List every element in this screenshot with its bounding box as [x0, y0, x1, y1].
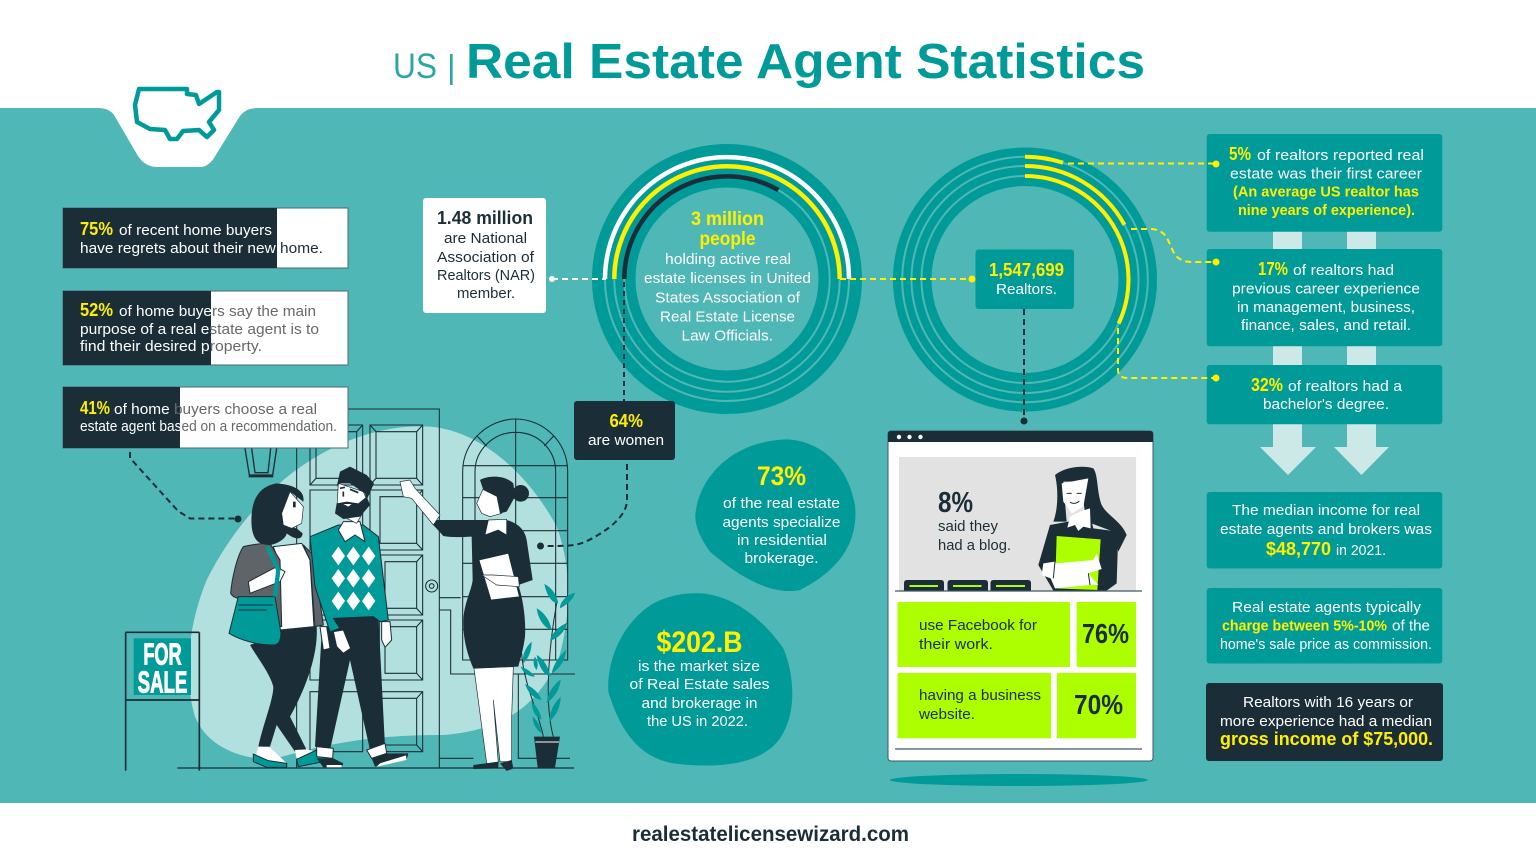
connector: 17%: [1131, 229, 1220, 266]
callout: 1,547,699 realtors: Realtors.: [996, 282, 1057, 298]
panel: 32% bachelor's: bachelor's degree.: [1263, 397, 1389, 413]
connector: 32%: [1118, 328, 1220, 382]
for sale sign: SALE: [138, 665, 187, 699]
panel: 52% purpose: find their desired p roperty.: [80, 339, 262, 355]
panel: 52% purpose: of home buye rs say the main: [119, 304, 316, 320]
callout: 1.48 million NAR: [423, 198, 546, 313]
panel: gross income: more experience had a median: [1220, 714, 1432, 730]
panel: 5% first career: estate was their first career: [1230, 166, 1422, 182]
wall and window: [439, 419, 575, 758]
callout: $202.B market size: and brokerage in: [642, 696, 758, 712]
stat: 70% website: [898, 673, 1136, 738]
callout: 1.48 million NAR: member.: [457, 286, 515, 302]
panel: 17% previous career: 17%: [1258, 259, 1288, 279]
connector: 5%: [1068, 160, 1220, 168]
callout: 73% residential: 73%: [757, 461, 806, 491]
blog panel: had a blog.: [938, 538, 1011, 554]
panel: 17% previous career: finance, sales, and retail.: [1241, 318, 1411, 334]
panel: 32% bachelor's: [1207, 365, 1442, 424]
text: 3 million people: Real Estate License: [660, 310, 795, 326]
browser shadow: [890, 774, 1148, 786]
callout: 64% are women: 64%: [610, 411, 643, 431]
blog panel: said they: [938, 519, 999, 535]
potted plant: [521, 584, 575, 768]
man buyer: [310, 467, 408, 767]
panel: browser window: [888, 431, 1153, 761]
panel: median income: The median income for real: [1232, 503, 1420, 519]
panel: median income: estate agents and brokers was: [1220, 522, 1432, 538]
callout: 1.48 million NAR: 1.48 million: [437, 208, 533, 228]
callout: 73% residential: [695, 439, 855, 591]
icon: US map: [135, 89, 219, 139]
illustration: couple and agent at the door: [126, 409, 575, 771]
panel: 41% recommendation: 41%: [80, 398, 110, 418]
text: 3 million people: estate licenses in United: [644, 271, 811, 287]
callout: $202.B market size: is the market size: [638, 659, 760, 675]
panel: median income: [1207, 492, 1442, 568]
chart: 1,547,699 realtors ring: [902, 157, 1148, 402]
callout: 1.48 million NAR: Realtors (NAR): [437, 268, 535, 284]
panel: 52% purpose: [63, 291, 348, 365]
text: 3 million people: States Association of: [655, 290, 801, 306]
connector: realtors box to browser: [1020, 309, 1028, 424]
panel: 41% recommendation: of home buyers choose a real: [114, 402, 317, 418]
illustration: woman with green book: [1038, 467, 1127, 591]
text: 3 million people: 3 million: [691, 208, 764, 230]
light blob background: [189, 426, 568, 759]
callout: $202.B market size: the US in 2022.: [647, 714, 748, 730]
connector: dark line to 64% box: [623, 282, 625, 401]
panel: 41% recommendation: estate agent based on a recommendation.: [80, 419, 337, 435]
connector: 41% box to woman: [130, 452, 242, 522]
title: |: [447, 48, 456, 85]
panel: gross income: [1206, 683, 1443, 761]
callout: 64% are women: are women: [588, 433, 664, 449]
panel: 5% first career: 5%: [1229, 144, 1251, 164]
panel: 5% first career: (An average US realtor has: [1233, 184, 1419, 200]
callout: 1.48 million NAR: Association of: [437, 250, 535, 266]
panel: median income: $48,770: [1266, 539, 1331, 559]
stat: 76% Facebook: their work.: [919, 637, 993, 653]
panel: 5% first career: nine years of experience).: [1238, 203, 1415, 219]
panel: commission: charge between 5%-10%: [1222, 618, 1387, 634]
panel: 32% bachelor's: 32%: [1251, 375, 1283, 395]
panel: median income: in 2021.: [1336, 543, 1386, 559]
panel: commission: home's sale price as commission.: [1220, 637, 1432, 653]
stat: 76% Facebook: 76%: [1082, 618, 1129, 649]
panel: 52% purpose: purpose of a real e state agent is to: [80, 322, 319, 338]
callout: 1,547,699 realtors: 1,547,699: [989, 260, 1064, 280]
title: Real Estate Agent Statistics: [466, 35, 1145, 89]
panel: 17% previous career: previous career experience: [1232, 282, 1420, 298]
panel: gross income: gross income of $75,000.: [1220, 729, 1433, 749]
callout: $202.B market size: of Real Estate sales: [630, 677, 770, 693]
ground line: [177, 766, 574, 770]
agent: [400, 477, 533, 771]
stat: 70% website: 70%: [1074, 689, 1123, 720]
blog panel: [899, 457, 1136, 591]
callout: 73% residential: agents specialize: [722, 515, 840, 531]
chart: 3 million ring: [605, 157, 849, 401]
woman buyer: [229, 483, 332, 767]
panel: 75% regrets: [63, 208, 348, 268]
callout: 73% residential: of the real estate: [723, 496, 840, 512]
panel: 75% regrets: of recent home buyers: [119, 223, 272, 239]
callout: 73% residential: brokerage.: [744, 551, 818, 567]
panel: 5% first career: [1207, 134, 1442, 232]
connector: 64% box to agent: [537, 464, 627, 550]
footer: website: realestatelicensewizard.com: [632, 823, 909, 846]
blog panel: 8%: [938, 487, 973, 519]
panel: gross income: Realtors with 16 years or: [1243, 695, 1413, 711]
panel: commission: Real estate agents typically: [1232, 600, 1422, 616]
panel: 32% bachelor's: of realtors had a: [1288, 379, 1403, 395]
callout: 1,547,699 realtors: [976, 250, 1074, 309]
callout: 1.48 million NAR: are National: [444, 231, 527, 247]
panel: 17% previous career: [1207, 249, 1442, 346]
stat: 70% website: website.: [918, 707, 975, 723]
panel: 75% regrets: have regrets about their new home.: [80, 241, 323, 257]
callout: $202.B market size: [608, 593, 792, 766]
text: 3 million people: people: [700, 228, 756, 250]
callout: 64% are women: [574, 401, 675, 460]
text: 3 million people: [644, 208, 811, 344]
lamp: [245, 448, 277, 477]
connector: white line to NAR box: [549, 276, 606, 282]
panel: 17% previous career: in management, business,: [1237, 300, 1415, 316]
panel: 41% recommendation: [63, 387, 348, 448]
for sale sign: FOR: [143, 637, 182, 671]
panel: 52% purpose: 52%: [80, 300, 113, 320]
callout: 73% residential: in residential: [737, 533, 827, 549]
callout: $202.B market size: $202.B: [656, 626, 742, 659]
panel: 5% first career: of realtors reported real: [1257, 148, 1424, 164]
door and frame: [297, 409, 439, 768]
panel: 75% regrets: 75%: [80, 219, 113, 239]
text: 3 million people: holding active real: [665, 252, 791, 268]
stat: 70% website: having a business: [919, 688, 1041, 704]
stat: 76% Facebook: use Facebook for: [919, 618, 1037, 634]
connector: yellow line to realtors box: [840, 276, 976, 282]
arrows: flow down right column: [1260, 231, 1389, 475]
panel: commission: [1207, 588, 1442, 664]
panel: 17% previous career: of realtors had: [1293, 263, 1394, 279]
stat: 76% Facebook: [898, 602, 1136, 667]
for sale sign: [126, 632, 199, 771]
panel: commission: of the: [1392, 618, 1430, 634]
title: US: [393, 47, 437, 86]
text: 3 million people: Law Officials.: [682, 328, 773, 344]
